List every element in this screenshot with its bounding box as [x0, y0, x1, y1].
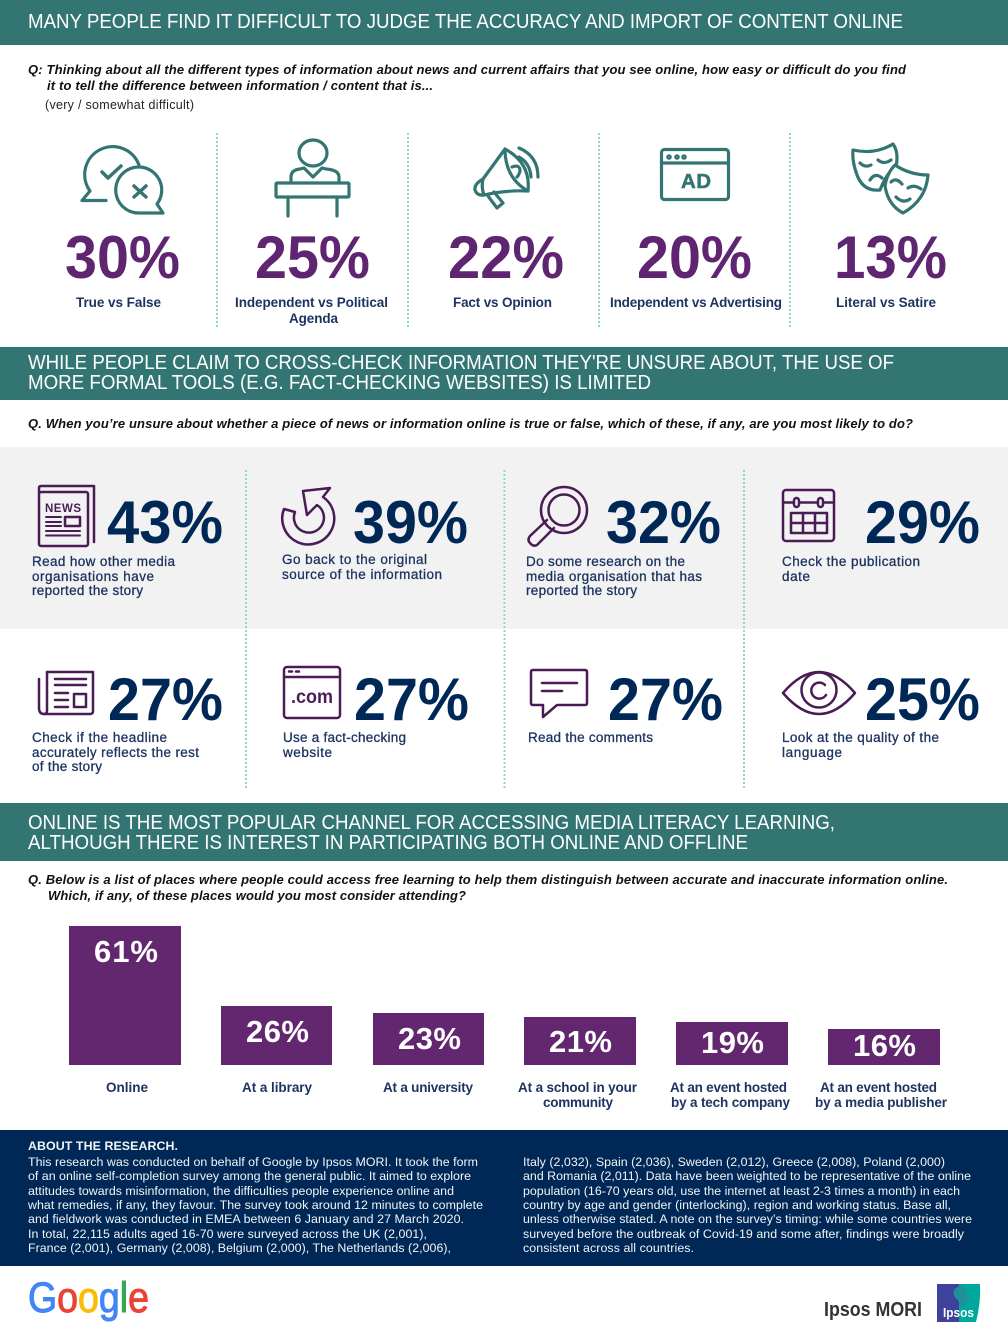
stat: publication date: Check the publication — [782, 554, 920, 569]
about the research panel: consistent across all countries. — [523, 1241, 694, 1255]
stat: headline — [32, 666, 223, 774]
about the research panel: of an online self-completion survey among the general public. It aimed to explore — [28, 1169, 471, 1183]
section 1 header: MANY PEOPLE FIND IT DIFFICULT TO JUDGE THE ACCURACY AND IMPORT OF CONTENT ONLINE — [28, 11, 903, 33]
stat: literal vs satire: 13% — [834, 224, 947, 291]
grey panel — [0, 447, 1008, 629]
bar: online 61%: Online — [106, 1080, 148, 1095]
section 3 question: Q. Below is a list of places where people could access free learning to help them distinguish between accurate and inaccurate information online. — [28, 872, 948, 887]
stat: fact-checking website: website — [282, 745, 332, 760]
bar: library 26%: At a library — [242, 1080, 312, 1095]
icon: megaphone — [475, 148, 538, 208]
stat: literal vs satire: Literal vs Satire — [836, 295, 936, 310]
stat: original source — [282, 489, 468, 582]
logo: Ipsos MORI wordmark: Ipsos MORI — [824, 1299, 922, 1321]
bar: media publisher 16%: by a media publisher — [815, 1095, 948, 1110]
about the research panel: This research was conducted on behalf of Google by Ipsos MORI. It took the form — [28, 1155, 478, 1169]
bar: school 21%: At a school in your — [518, 1080, 638, 1095]
stat: fact-checking website — [282, 666, 469, 760]
stat: quality of language: Look at the quality of the — [782, 730, 939, 745]
icon: magnifying glass — [528, 487, 587, 546]
icon: advert browser window: AD — [681, 170, 711, 193]
stat: publication date: 29% — [865, 489, 980, 556]
bar: online 61% — [69, 926, 181, 1095]
stat: original source: source of the information — [282, 567, 442, 582]
stat: fact vs opinion: 22% — [448, 224, 564, 291]
icon: person at lectern — [276, 140, 349, 216]
stat: read other media: organisations have — [32, 569, 154, 584]
stat: quality of language: language — [782, 745, 842, 760]
bar: school 21%: community — [543, 1095, 613, 1110]
about the research panel: population (16-70 years old, use the internet at least 2-3 times a month) in each — [523, 1184, 960, 1198]
section 1 header — [0, 0, 1008, 45]
stat: fact-checking website: Use a fact-checking — [283, 730, 406, 745]
stat: publication date — [782, 489, 980, 584]
stat: independent vs advertising — [610, 224, 782, 310]
stat: research organisation: 32% — [606, 489, 721, 556]
icon: newspaper with NEWS — [39, 486, 94, 546]
stat: read other media: 43% — [107, 489, 223, 556]
about the research panel: attitudes towards misinformation, the difficulties people experience online and — [28, 1184, 454, 1198]
icon: true false speech bubbles — [82, 147, 163, 213]
stat: research organisation — [526, 489, 721, 598]
logo: Ipsos badge: Ipsos — [943, 1305, 974, 1320]
stat: independent vs political agenda — [235, 224, 388, 326]
bar: library 26%: 26% — [246, 1014, 309, 1049]
section 3 header: ALTHOUGH THERE IS INTEREST IN PARTICIPATING BOTH ONLINE AND OFFLINE — [28, 832, 748, 854]
section 1 question: (very / somewhat difficult) — [45, 98, 194, 112]
icon: theatre masks — [853, 144, 928, 213]
about the research panel: what remedies, if any, they favour. The survey took around 12 minutes to complete — [27, 1198, 483, 1212]
stat: research organisation: media organisation that has — [526, 569, 702, 584]
section 1 question: Q: Thinking about all the different types of information about news and current affairs that you see online, how easy or difficult do you find — [28, 62, 907, 77]
icon: comment bubble — [531, 670, 587, 717]
section 1 question — [28, 62, 907, 112]
bar: university 23%: 23% — [398, 1021, 461, 1056]
stat: fact vs opinion: Fact vs Opinion — [453, 295, 552, 310]
stat: independent vs advertising: 20% — [637, 224, 752, 291]
stat: headline: Check if the headline — [32, 730, 167, 745]
bar: university 23%: At a university — [383, 1080, 473, 1095]
stat: read other media — [32, 489, 223, 598]
bar: tech company 19%: 19% — [701, 1025, 764, 1060]
stat: fact-checking website: 27% — [354, 666, 469, 733]
icon: folded newspaper — [39, 672, 93, 714]
stat: headline: accurately reflects the rest — [32, 745, 199, 760]
stat: independent vs advertising: Independent vs Advertising — [610, 295, 782, 310]
about the research panel: unless otherwise stated. A note on the survey’s timing: while some countries were — [523, 1212, 972, 1226]
section 1 question: it to tell the difference between information / content that is... — [47, 78, 433, 93]
section 3 header: ONLINE IS THE MOST POPULAR CHANNEL FOR ACCESSING MEDIA LITERACY LEARNING, — [28, 812, 835, 834]
icon: dot-com browser: .com — [291, 687, 333, 708]
about the research panel: Italy (2,032), Spain (2,036), Sweden (2,012), Greece (2,008), Poland (2,000) — [523, 1155, 945, 1169]
stat: headline: of the story — [32, 759, 102, 774]
icon: newspaper with NEWS: NEWS — [45, 503, 81, 515]
section 3 question: Which, if any, of these places would you most consider attending? — [48, 888, 466, 903]
about the research panel: and fieldwork was conducted in EMEA between 6 January and 27 March 2020. — [28, 1212, 464, 1226]
stat: original source: 39% — [353, 489, 468, 556]
about the research panel: In total, 22,115 adults aged 16-70 were surveyed across the UK (2,001), — [28, 1227, 427, 1241]
about the research panel: ABOUT THE RESEARCH. — [28, 1139, 178, 1153]
about the research panel: country by age and gender (interlocking), region and working status. Base all, — [523, 1198, 951, 1212]
bar: tech company 19%: At an event hosted — [670, 1080, 787, 1095]
stat: original source: Go back to the original — [282, 552, 427, 567]
bar: media publisher 16%: 16% — [853, 1028, 916, 1063]
bar: library 26% — [221, 1006, 332, 1095]
icon: dot-com browser — [284, 667, 340, 718]
stat: research organisation: reported the story — [526, 583, 637, 598]
stat: comments: Read the comments — [528, 730, 653, 745]
bar: university 23% — [373, 1013, 484, 1095]
stat: comments — [528, 666, 723, 745]
bar: media publisher 16%: At an event hosted — [820, 1080, 937, 1095]
stat: true vs false: 30% — [65, 224, 180, 291]
bar: online 61%: 61% — [94, 934, 158, 969]
logo: Google: Google — [28, 1274, 149, 1322]
stat: quality of language — [782, 666, 980, 760]
bar: school 21%: 21% — [549, 1024, 612, 1059]
bar: tech company 19% — [670, 1022, 790, 1110]
logo: Ipsos badge — [937, 1284, 980, 1322]
about the research panel — [0, 1130, 1008, 1266]
stat: headline: 27% — [108, 666, 223, 733]
stat: research organisation: Do some research on the — [526, 554, 685, 569]
section 2 header — [0, 347, 1008, 400]
stat: independent vs political agenda: Agenda — [289, 311, 338, 326]
bar: tech company 19%: by a tech company — [671, 1095, 790, 1110]
stat: independent vs political agenda: Independent vs Political — [235, 295, 388, 310]
stat: comments: 27% — [608, 666, 723, 733]
icon: return arrow — [282, 488, 334, 544]
section 3 header — [0, 803, 1008, 861]
stat: read other media: Read how other media — [32, 554, 175, 569]
about the research panel: France (2,001), Germany (2,008), Belgium (2,000), The Netherlands (2,006), — [28, 1241, 451, 1255]
stat: quality of language: 25% — [865, 666, 980, 733]
about the research panel: surveyed before the outbreak of Covid-19 and some after, findings were broadly — [523, 1227, 965, 1241]
icon: calendar — [783, 490, 834, 541]
bar: media publisher 16% — [815, 1028, 948, 1110]
icon: advert browser window — [662, 150, 728, 200]
section 3 question — [28, 872, 948, 903]
bar chart: learning channels — [69, 926, 948, 1110]
section 2 question: Q. When you’re unsure about whether a piece of news or information online is true or false, which of these, if any, are you most likely to do? — [28, 416, 913, 431]
stat: publication date: date — [782, 569, 810, 584]
section 2 header: MORE FORMAL TOOLS (E.G. FACT-CHECKING WEBSITES) IS LIMITED — [28, 372, 651, 394]
stat: true vs false: True vs False — [76, 295, 161, 310]
about the research panel: and Romania (2,011). Data have been weighted to be representative of the online — [523, 1169, 971, 1183]
stat: independent vs political agenda: 25% — [255, 224, 370, 291]
bar: school 21% — [518, 1017, 638, 1110]
icon: eye — [783, 672, 855, 714]
stat: read other media: reported the story — [32, 583, 143, 598]
section 2 header: WHILE PEOPLE CLAIM TO CROSS-CHECK INFORMATION THEY'RE UNSURE ABOUT, THE USE OF — [28, 352, 894, 374]
